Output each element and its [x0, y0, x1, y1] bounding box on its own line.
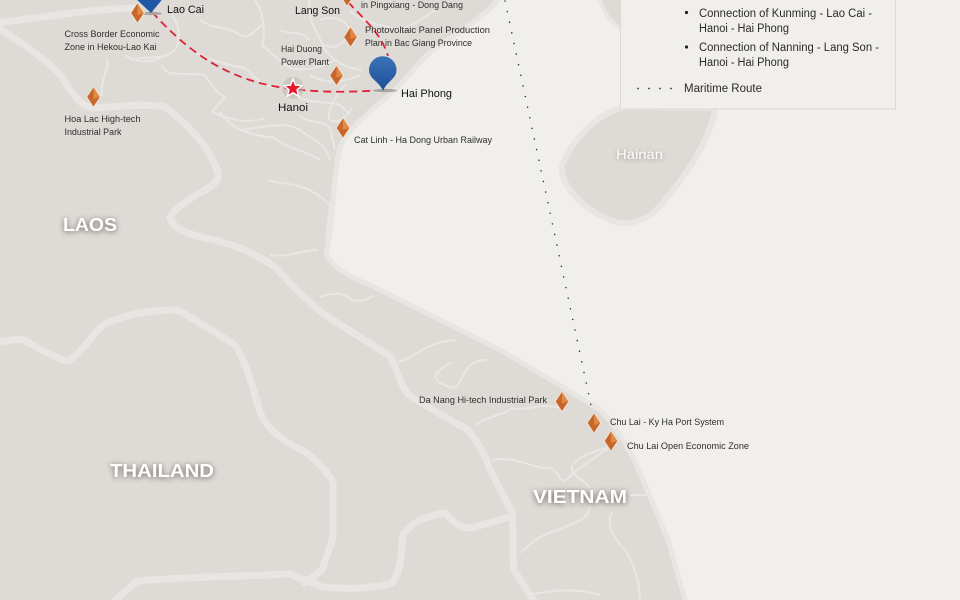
label: Chu Lai - Ky Ha: Chu Lai - Ky Ha Port System: [610, 417, 724, 427]
label: Hai Duong: Power Plant: [281, 57, 329, 67]
diamond: Hekou-Lao Kai: [130, 2, 145, 24]
diamond: Da Nang: [554, 390, 570, 412]
label: Hai Duong: Hai Duong: [281, 44, 322, 54]
city label: Lang Son: Lang Son: [295, 5, 340, 17]
icon: Hanoi star: [282, 77, 304, 99]
map: Hainan island: [562, 107, 716, 223]
legend item: Kunming connection: Hanoi - Hai Phong: [699, 23, 789, 35]
city label: Lao Cai: Lao Cai: [167, 4, 204, 16]
label: Cat Linh: Cat Linh - Ha Dong Urban Railway: [354, 135, 492, 145]
map: mainland: [0, 0, 688, 600]
map: northeastern land fragment: [598, 0, 625, 30]
road route: Kunming - Lao Cai - Hanoi - Hai Phong: [152, 12, 383, 92]
legend item: Nanning connection: [685, 42, 879, 69]
label: Cross Border Economic Zone: Cross Border Economic: [64, 29, 160, 39]
country label: Laos: LAOS: [63, 215, 117, 235]
country label: Thailand: THAILAND: [110, 461, 214, 481]
label: Hoa Lac: Industrial Park: [64, 127, 122, 137]
legend item: Nanning connection: Connection of Nanning - Lang Son -: [699, 42, 879, 54]
label: Da Nang: Da Nang Hi-tech Industrial Park: [419, 395, 547, 405]
label: Photovoltaic Panel: Plan in Bac Giang Province: [365, 38, 472, 48]
island label: Hainan: Hainan: [616, 146, 663, 162]
legend item: Nanning connection: Hanoi - Hai Phong: [699, 57, 789, 69]
label: Pingxiang - Dong Dang: in Pingxiang - Dong Dang: [361, 0, 463, 10]
diamond: Hoa Lac: [86, 86, 101, 108]
diamond: Bac Giang: [343, 26, 358, 48]
diamond: Hai Duong: [329, 64, 344, 86]
maritime route dotted line: [505, 1, 592, 410]
road route: Nanning - Lang Son: [348, 2, 388, 56]
legend item: Kunming connection: Connection of Kunming - Lao Cai -: [699, 8, 872, 20]
icon: Lao Cai pin: [133, 0, 165, 15]
diamond: Lang Son: [340, 0, 354, 7]
label: Chu Lai Open Economic Zone: Chu Lai Open Economic Zone: [627, 441, 749, 451]
label: Cross Border Economic Zone: [64, 29, 160, 52]
label: Hoa Lac: [64, 114, 140, 137]
legend item: Maritime Route: Maritime Route: [684, 83, 762, 95]
legend panel: [620, 0, 896, 109]
diamond: Chu Lai - Ky Ha: [586, 412, 602, 434]
label: Photovoltaic Panel: [365, 25, 490, 48]
diamond: Cat Linh: [336, 117, 350, 139]
icon: Hai Phong pin: [369, 56, 397, 92]
city label: Hanoi: Hanoi: [278, 102, 308, 114]
legend item: Maritime Route: [637, 83, 762, 95]
country label: Vietnam: VIETNAM: [533, 486, 627, 507]
label: Photovoltaic Panel: Photovoltaic Panel Production: [365, 25, 490, 35]
label: Hoa Lac: Hoa Lac High-tech: [64, 114, 140, 124]
legend item: Kunming connection: [685, 8, 872, 35]
city label: Hai Phong: Hai Phong: [401, 88, 452, 100]
label: Hai Duong: [281, 44, 329, 67]
diamond: Chu Lai Open Economic Zone: [604, 430, 618, 452]
map: provincial borders: [102, 0, 650, 600]
map: national borders: [0, 8, 535, 600]
label: Cross Border Economic Zone: Zone in Hekou-Lao Kai: [64, 42, 156, 52]
